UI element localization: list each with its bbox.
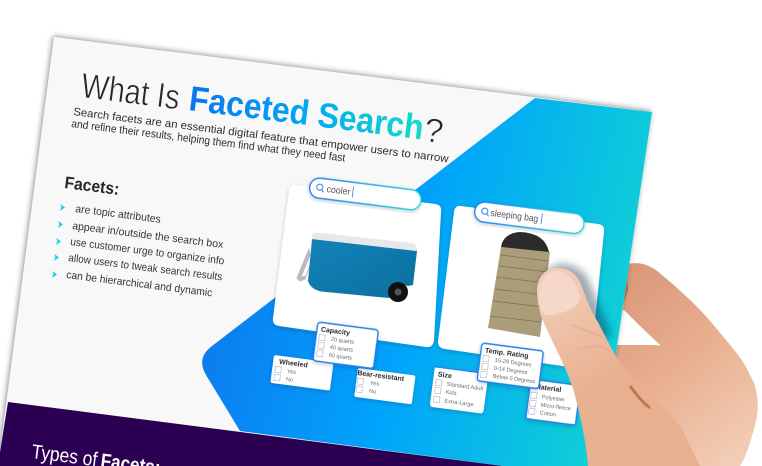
blue gradient panel xyxy=(202,98,652,466)
facet box: size: Standard Adult xyxy=(446,382,484,393)
facet box: bear-resistant: Bear-resistant xyxy=(357,370,405,383)
facet box: material: Polyester xyxy=(541,395,565,404)
facet box: size: Size xyxy=(437,371,452,380)
facet box: temp rating: 15-29 Degrees xyxy=(494,358,532,369)
purple footer band xyxy=(0,402,503,466)
card: cooler product xyxy=(273,177,441,347)
facets bullet list: can be hierarchical and dynamic xyxy=(66,269,214,299)
facet box: wheeled: Yes xyxy=(287,369,297,376)
facet box: temp rating: 0-14 Degrees xyxy=(493,366,528,376)
search bar: cooler: cooler xyxy=(326,184,351,198)
facet box: material: Micro-fleece xyxy=(540,403,571,412)
title: Faceted Search xyxy=(187,79,426,148)
facet box: capacity: Capacity xyxy=(321,326,350,337)
facet box: bear-resistant: Yes xyxy=(370,381,380,388)
facet box: temp rating: Temp. Rating xyxy=(485,347,529,360)
hand: fingers behind the page xyxy=(590,263,758,466)
icon: sleeping bag xyxy=(488,232,550,337)
card: sleeping bag product xyxy=(438,201,604,370)
title xyxy=(79,66,446,151)
search bar: cooler xyxy=(308,177,422,211)
title: What Is xyxy=(79,66,182,117)
icon: cooler xyxy=(297,233,417,302)
facet box: size: Kids xyxy=(445,390,457,397)
facet box: material: Material xyxy=(535,384,562,394)
search bar: sleeping bag: sleeping bag xyxy=(490,208,539,225)
thumb shadow xyxy=(540,264,612,345)
hand: thumb over the page xyxy=(537,268,700,466)
facet box: capacity xyxy=(313,322,378,369)
title: ? xyxy=(422,111,446,151)
facets bullet list: allow users to tweak search results xyxy=(68,252,223,283)
facet box: bear-resistant xyxy=(354,368,416,404)
facet box: capacity: 20 quarts xyxy=(330,337,354,346)
facets heading: Facets: xyxy=(63,173,120,199)
intro text: and refine their results, helping them find what they need fast xyxy=(71,118,346,165)
facet box: wheeled: No xyxy=(285,377,293,384)
facets bullet list: use customer urge to organize info xyxy=(70,236,225,267)
facet box: size: Extra-Large xyxy=(444,399,474,408)
facet box: wheeled xyxy=(270,355,333,391)
facet box: temp rating: Below 0 Degrees xyxy=(492,374,536,385)
facet box: capacity: 40 quarts xyxy=(329,345,353,354)
facet box: material: Cotton xyxy=(539,410,556,419)
section heading: types of facets xyxy=(30,441,162,466)
facet box: temp rating xyxy=(477,343,543,389)
facet box: wheeled: Wheeled xyxy=(279,359,308,369)
facets bullet list: are topic attributes xyxy=(75,203,162,226)
knuckle crease xyxy=(630,386,650,408)
facet box: size xyxy=(430,366,489,414)
facet box: capacity: 60 quarts xyxy=(328,353,352,362)
facets bullet list: appear in/outside the search box xyxy=(72,220,224,251)
thumbnail xyxy=(539,271,580,315)
facet box: bear-resistant: No xyxy=(369,389,376,396)
facets bullet list xyxy=(52,203,225,299)
search bar: sleeping bag xyxy=(473,201,585,235)
page sheet xyxy=(0,37,652,466)
intro text: Search facets are an essential digital feature that empower users to narrow xyxy=(73,106,449,165)
facet box: material xyxy=(526,379,581,425)
